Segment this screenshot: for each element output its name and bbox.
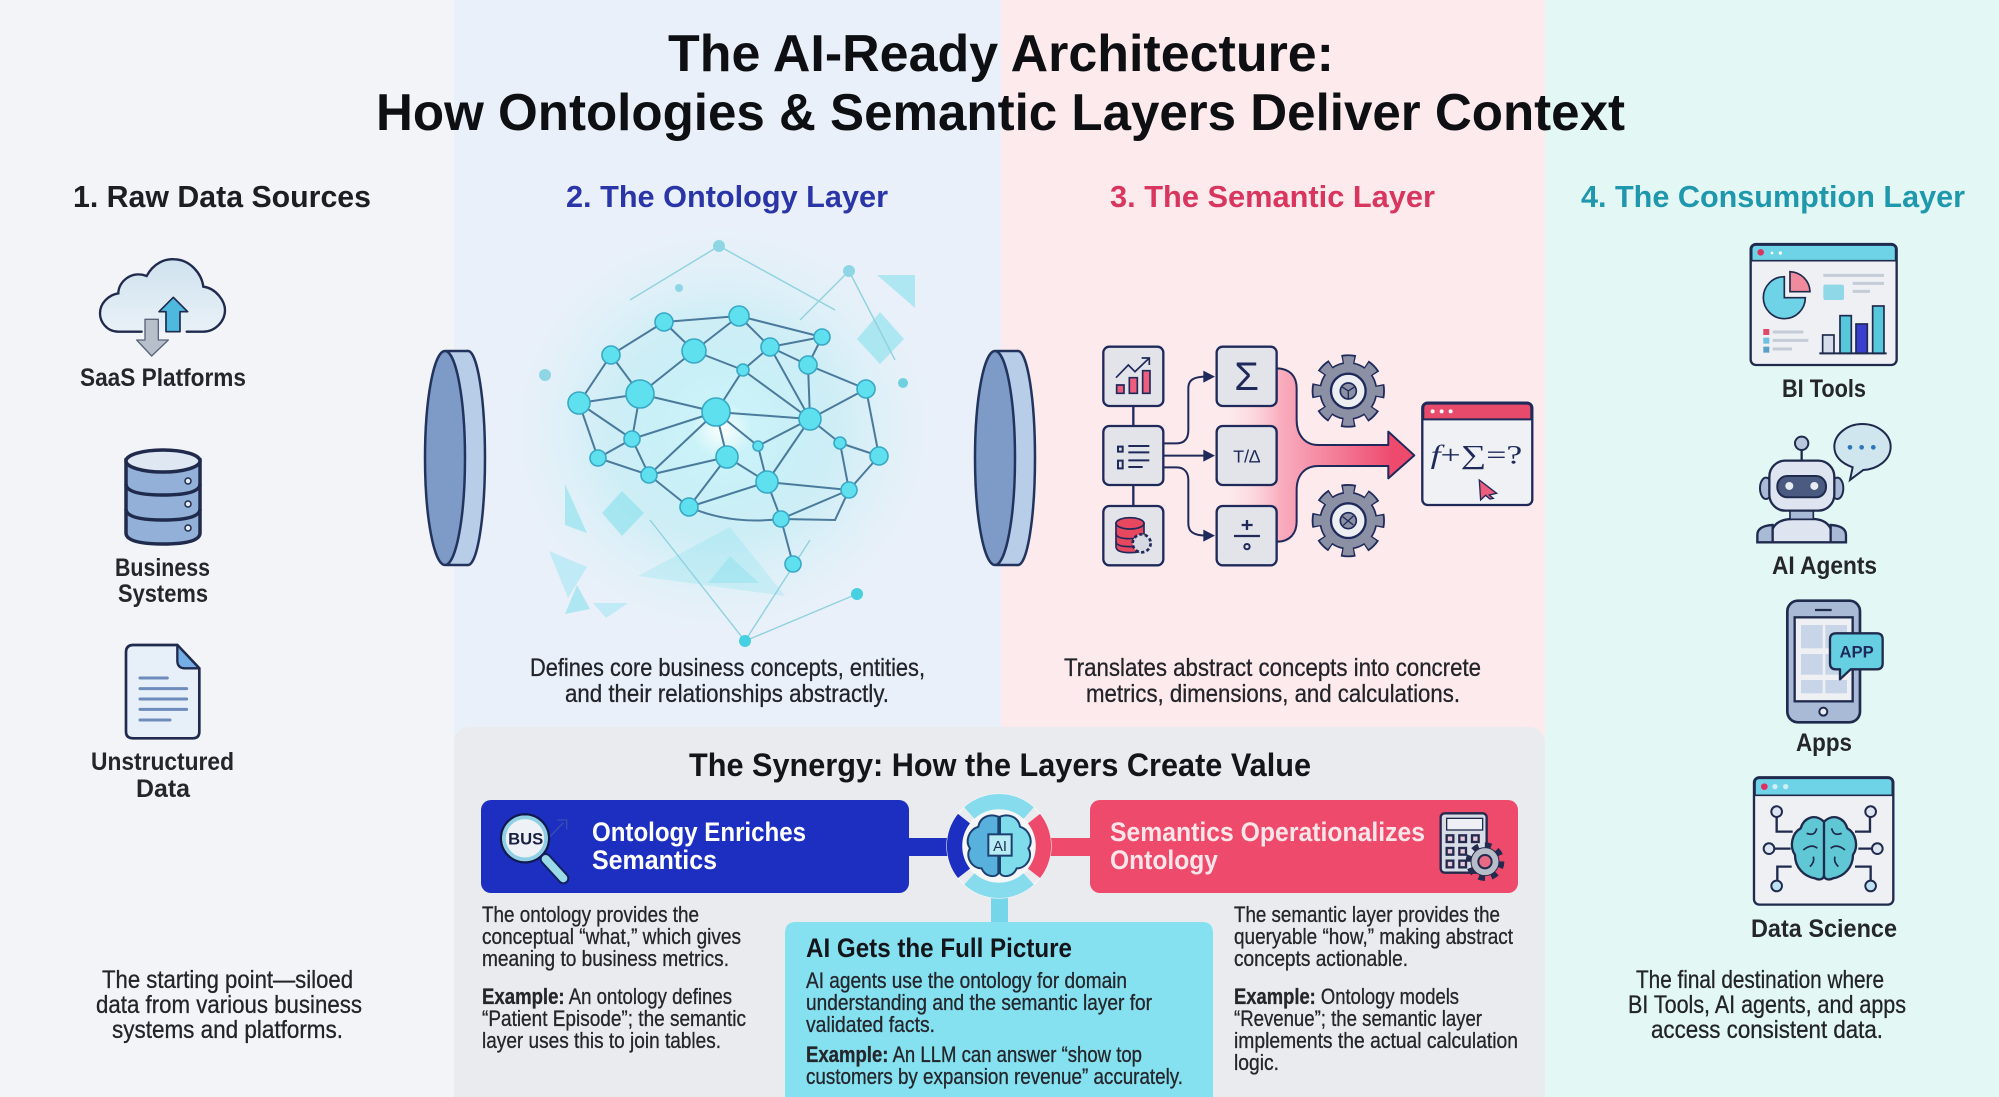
text: semantic explanation: The semantic layer provides the xyxy=(1234,902,1500,927)
panel: consumption layer xyxy=(1545,0,1999,1097)
lens: semantic gateway xyxy=(975,351,1035,565)
text: consumption description: BI Tools, AI agents, and apps xyxy=(1628,991,1906,1019)
text: ontology description: and their relationships abstractly. xyxy=(565,680,889,708)
text: semantic explanation: queryable “how,” making abstract xyxy=(1234,924,1513,949)
title: How Ontologies & Semantic Layers Deliver Context xyxy=(376,84,1625,142)
card: ontology enriches semantics: Ontology Enriches xyxy=(592,817,806,847)
label: business systems: Systems xyxy=(118,580,208,608)
heading: raw data sources: 1. Raw Data Sources xyxy=(73,179,371,214)
card: ai gets the full picture: Example: An LLM can answer “show top xyxy=(806,1042,1142,1067)
label: apps: Apps xyxy=(1796,729,1852,757)
illustration: neural brain network xyxy=(507,225,937,647)
icon: magnifier with bus xyxy=(501,814,567,878)
icon: bi dashboard xyxy=(1751,244,1897,365)
card: ontology enriches semantics xyxy=(481,800,909,893)
text: ontology explanation: The ontology provides the xyxy=(482,902,699,927)
icon: type ratio: T/∆ xyxy=(1233,447,1260,467)
icon: growth chart xyxy=(1116,358,1150,393)
card: semantics operationalizes ontology: Ontology xyxy=(1110,845,1218,875)
text: semantic explanation: logic. xyxy=(1234,1050,1279,1075)
text: semantic explanation: implements the actual calculation xyxy=(1234,1028,1518,1053)
text: consumption description: The final destination where xyxy=(1636,966,1884,994)
icon: database xyxy=(126,450,200,544)
icon: mobile app: APP xyxy=(1840,642,1874,661)
icon: gear top xyxy=(1318,360,1379,422)
text: raw data description: data from various business xyxy=(96,991,362,1019)
label: unstructured data: Data xyxy=(136,775,191,803)
icon: red database with gear xyxy=(1116,518,1151,553)
label: business systems xyxy=(115,554,210,608)
label: saas platforms: SaaS Platforms xyxy=(80,364,246,392)
icon: magnifier with bus: BUS xyxy=(508,829,543,848)
connector: cyan link xyxy=(991,885,1008,930)
card: ai gets the full picture: understanding and the semantic layer for xyxy=(806,990,1152,1015)
text: raw data description: systems and platforms. xyxy=(112,1016,343,1044)
arrow: pink merging flow xyxy=(1227,368,1414,542)
icon: mobile app xyxy=(1787,601,1883,722)
icon: calculator with gear xyxy=(1441,813,1500,877)
label: business systems: Business xyxy=(115,554,210,582)
icon: formula window: f+∑=? xyxy=(1431,439,1522,469)
panel: ontology layer xyxy=(454,0,1001,1097)
text: ontology explanation: Example: An ontology defines xyxy=(482,984,732,1009)
icon: list xyxy=(1118,446,1149,468)
icon: gear bottom xyxy=(1318,490,1379,551)
card: semantics operationalizes ontology xyxy=(1090,800,1518,893)
icon: division xyxy=(1234,520,1260,549)
title xyxy=(376,25,1625,142)
text: ontology explanation: “Patient Episode”; the semantic xyxy=(482,1006,746,1031)
card: ai gets the full picture xyxy=(785,922,1213,1097)
icon: ai brain hub: AI xyxy=(993,839,1007,855)
text: semantic description xyxy=(1064,654,1481,708)
text: raw data description xyxy=(96,966,362,1044)
panel: raw data sources xyxy=(0,0,454,1097)
text: semantic explanation: concepts actionable. xyxy=(1234,946,1408,971)
text: semantic explanation: “Revenue”; the semantic layer xyxy=(1234,1006,1482,1031)
text: ontology explanation: layer uses this to join tables. xyxy=(482,1028,721,1053)
lens: ontology gateway xyxy=(425,351,485,565)
text: semantic explanation xyxy=(1234,902,1518,1075)
card: ai gets the full picture: validated facts. xyxy=(806,1012,935,1037)
text: ontology explanation: conceptual “what,” which gives xyxy=(482,924,741,949)
icon: data science window xyxy=(1754,777,1893,905)
text: ontology explanation: meaning to business metrics. xyxy=(482,946,729,971)
card: semantics operationalizes ontology: Semantics Operationalizes xyxy=(1110,817,1425,847)
connector: blue link xyxy=(900,838,950,856)
icon: ai robot xyxy=(1757,424,1891,542)
text: consumption description xyxy=(1628,966,1906,1044)
text: ontology description: Defines core business concepts, entities, xyxy=(530,654,925,682)
heading: synergy: The Synergy: How the Layers Create Value xyxy=(689,747,1311,783)
card: ai gets the full picture: AI agents use the ontology for domain xyxy=(806,968,1127,993)
text: semantic description: metrics, dimensions, and calculations. xyxy=(1086,680,1460,708)
label: bi tools: BI Tools xyxy=(1782,375,1866,403)
label: ai agents: AI Agents xyxy=(1772,552,1877,580)
card: ai gets the full picture: AI Gets the Full Picture xyxy=(806,933,1072,963)
text: ontology explanation xyxy=(482,902,746,1053)
card: ai gets the full picture: customers by expansion revenue” accurately. xyxy=(806,1064,1183,1089)
card: ontology enriches semantics: Semantics xyxy=(592,845,717,875)
title: The AI-Ready Architecture: xyxy=(668,25,1334,83)
icon: document xyxy=(126,645,199,738)
panel: the synergy xyxy=(454,727,1545,1097)
label: unstructured data: Unstructured xyxy=(91,748,234,776)
connector: red link xyxy=(1050,838,1100,856)
label: unstructured data xyxy=(91,748,234,803)
diagram: metrics flow into calculations xyxy=(1103,347,1532,565)
text: semantic description: Translates abstract concepts into concrete xyxy=(1064,654,1481,682)
text: raw data description: The starting point—siloed xyxy=(102,966,353,994)
icon: cloud with arrows xyxy=(100,259,225,356)
heading: ontology layer: 2. The Ontology Layer xyxy=(566,179,888,214)
icon: ai brain hub xyxy=(947,794,1051,898)
heading: consumption layer: 4. The Consumption Layer xyxy=(1581,179,1965,214)
text: consumption description: access consistent data. xyxy=(1651,1016,1883,1044)
heading: semantic layer: 3. The Semantic Layer xyxy=(1110,179,1435,214)
label: data science: Data Science xyxy=(1751,915,1897,943)
icon: sigma: Σ xyxy=(1234,355,1259,399)
text: ontology description xyxy=(530,654,925,708)
icon: formula window xyxy=(1422,403,1532,505)
text: semantic explanation: Example: Ontology models xyxy=(1234,984,1459,1009)
panel: semantic layer xyxy=(1001,0,1545,1097)
